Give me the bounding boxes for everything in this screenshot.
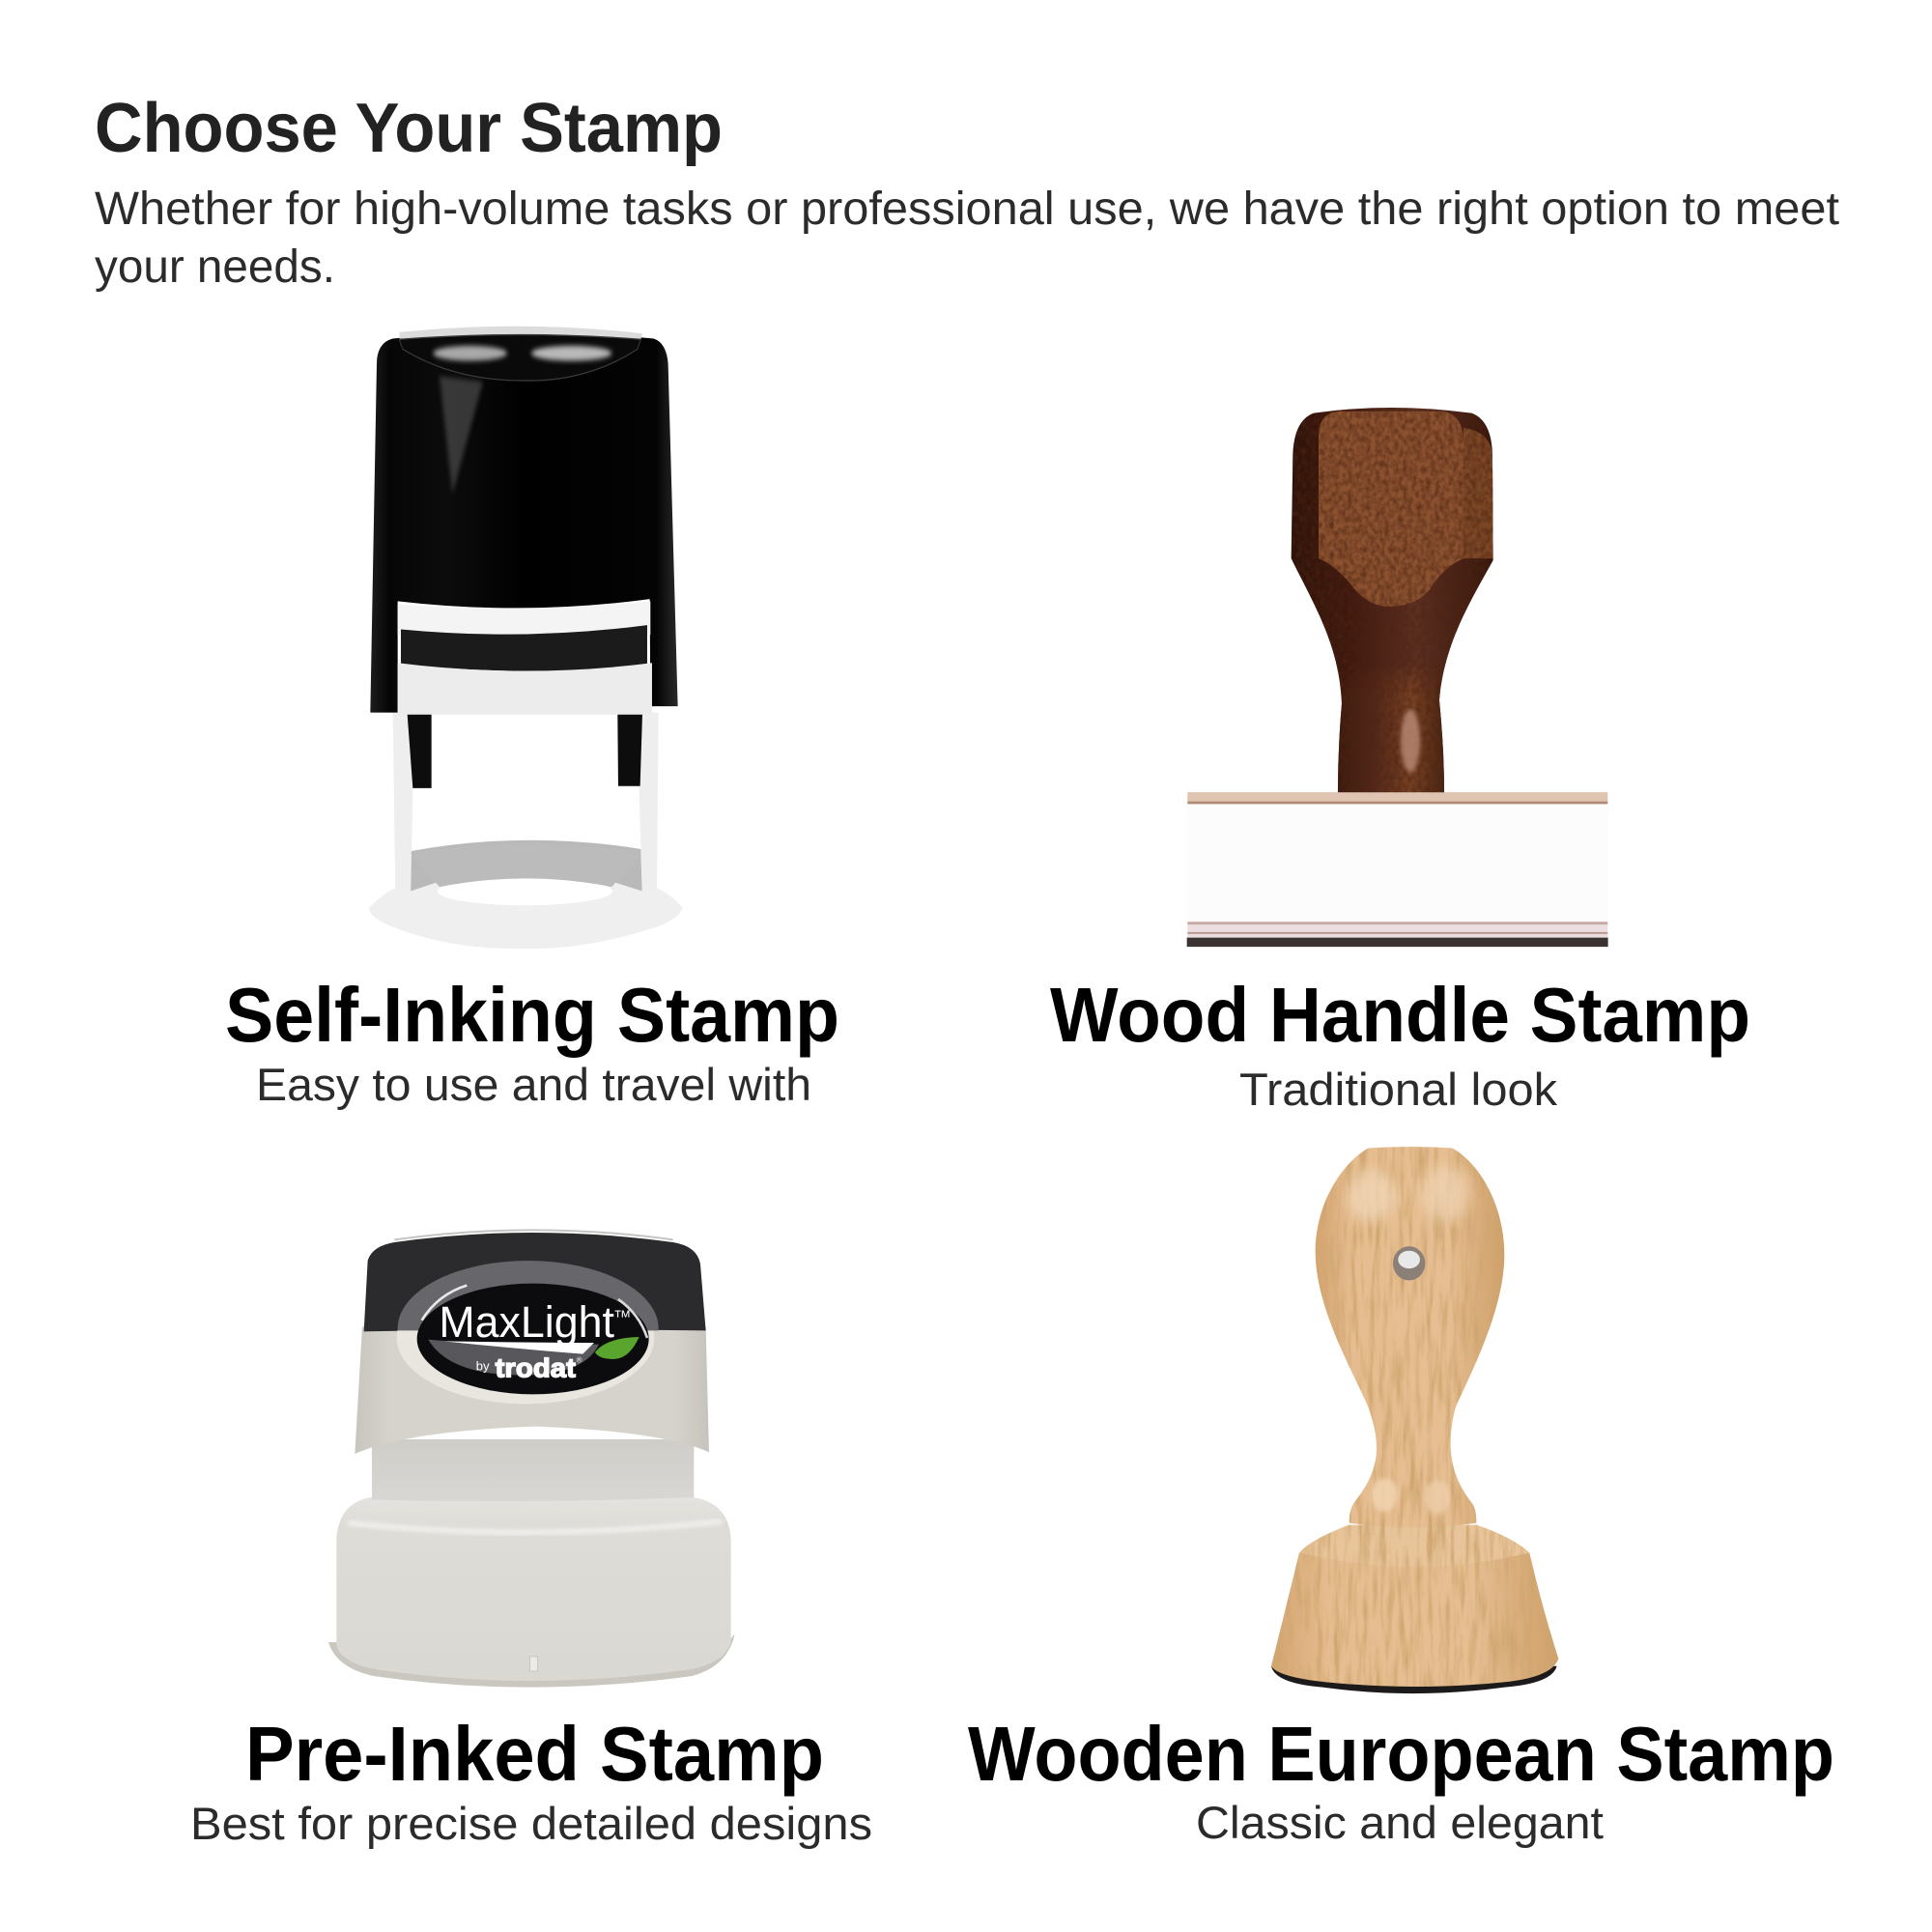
grey inner base — [409, 840, 642, 897]
caption: pre-inked stamp: Best for precise detailed designs — [190, 1798, 872, 1849]
grey shell — [355, 1326, 709, 1454]
black cap — [364, 1233, 706, 1331]
handle — [1292, 408, 1493, 792]
heading: wooden european stamp: Wooden European Stamp — [968, 1711, 1834, 1797]
by trodat: by — [476, 1358, 490, 1373]
logo emblem — [397, 1261, 659, 1404]
icon: self-inking stamp photo — [369, 327, 683, 949]
panel: pre-inked stamp — [190, 1230, 872, 1849]
side face — [1463, 428, 1493, 558]
cap reflection — [440, 377, 483, 494]
heading: pre-inked stamp: Pre-Inked Stamp — [245, 1711, 824, 1797]
caption: self-inking stamp: Easy to use and travel with — [256, 1059, 811, 1110]
base — [336, 1488, 731, 1681]
intro paragraph — [95, 184, 1839, 293]
black cap — [370, 332, 678, 713]
icon: wood handle stamp photo — [1186, 408, 1608, 947]
wood body — [1271, 1147, 1558, 1687]
clear block — [1186, 790, 1608, 947]
title: Choose Your Stamp — [95, 90, 723, 167]
metal pin — [1393, 1246, 1425, 1281]
rubber pad — [1271, 1666, 1557, 1693]
handle silhouette — [1292, 408, 1493, 792]
caption: traditional look: Traditional look — [1239, 1064, 1558, 1115]
black dial band — [401, 625, 647, 671]
white legs — [393, 713, 659, 899]
white collar — [398, 601, 650, 640]
caption: wooden european stamp: Classic and elegant — [1196, 1797, 1604, 1848]
icon: pre-inked stamp photo — [328, 1230, 735, 1688]
emblem ring — [398, 1261, 659, 1331]
wood highlights — [1348, 1170, 1396, 1222]
logo wordmark: MaxLight — [439, 1297, 614, 1347]
trademark: ™ — [613, 1306, 632, 1326]
heading: self-inking stamp: Self-Inking Stamp — [225, 972, 839, 1058]
lid top — [399, 327, 642, 340]
intro paragraph: Whether for high-volume tasks or professional use, we have the right option to meet — [95, 184, 1839, 235]
icon: wooden european stamp photo — [1271, 1147, 1558, 1693]
panel: wooden european stamp — [968, 1147, 1834, 1848]
emblem halo — [397, 1272, 654, 1404]
lower collar — [398, 663, 652, 715]
panel: wood handle stamp — [1050, 408, 1750, 1115]
by trodat: ® — [577, 1356, 582, 1365]
base rim — [328, 1634, 735, 1688]
emblem oval — [417, 1284, 649, 1394]
by trodat: trodat — [496, 1353, 576, 1383]
black pins — [408, 715, 432, 788]
base ring — [369, 875, 683, 949]
wood base — [1271, 1524, 1558, 1687]
gloss highlight — [1401, 709, 1420, 772]
heading: wood handle stamp: Wood Handle Stamp — [1050, 972, 1750, 1058]
front face — [1319, 412, 1463, 607]
intro paragraph: your needs. — [95, 242, 335, 293]
wood handle — [1316, 1147, 1504, 1527]
panel: self-inking stamp — [225, 327, 839, 1110]
lower neck — [1338, 668, 1444, 792]
leaf — [595, 1337, 639, 1359]
neck — [372, 1439, 694, 1501]
